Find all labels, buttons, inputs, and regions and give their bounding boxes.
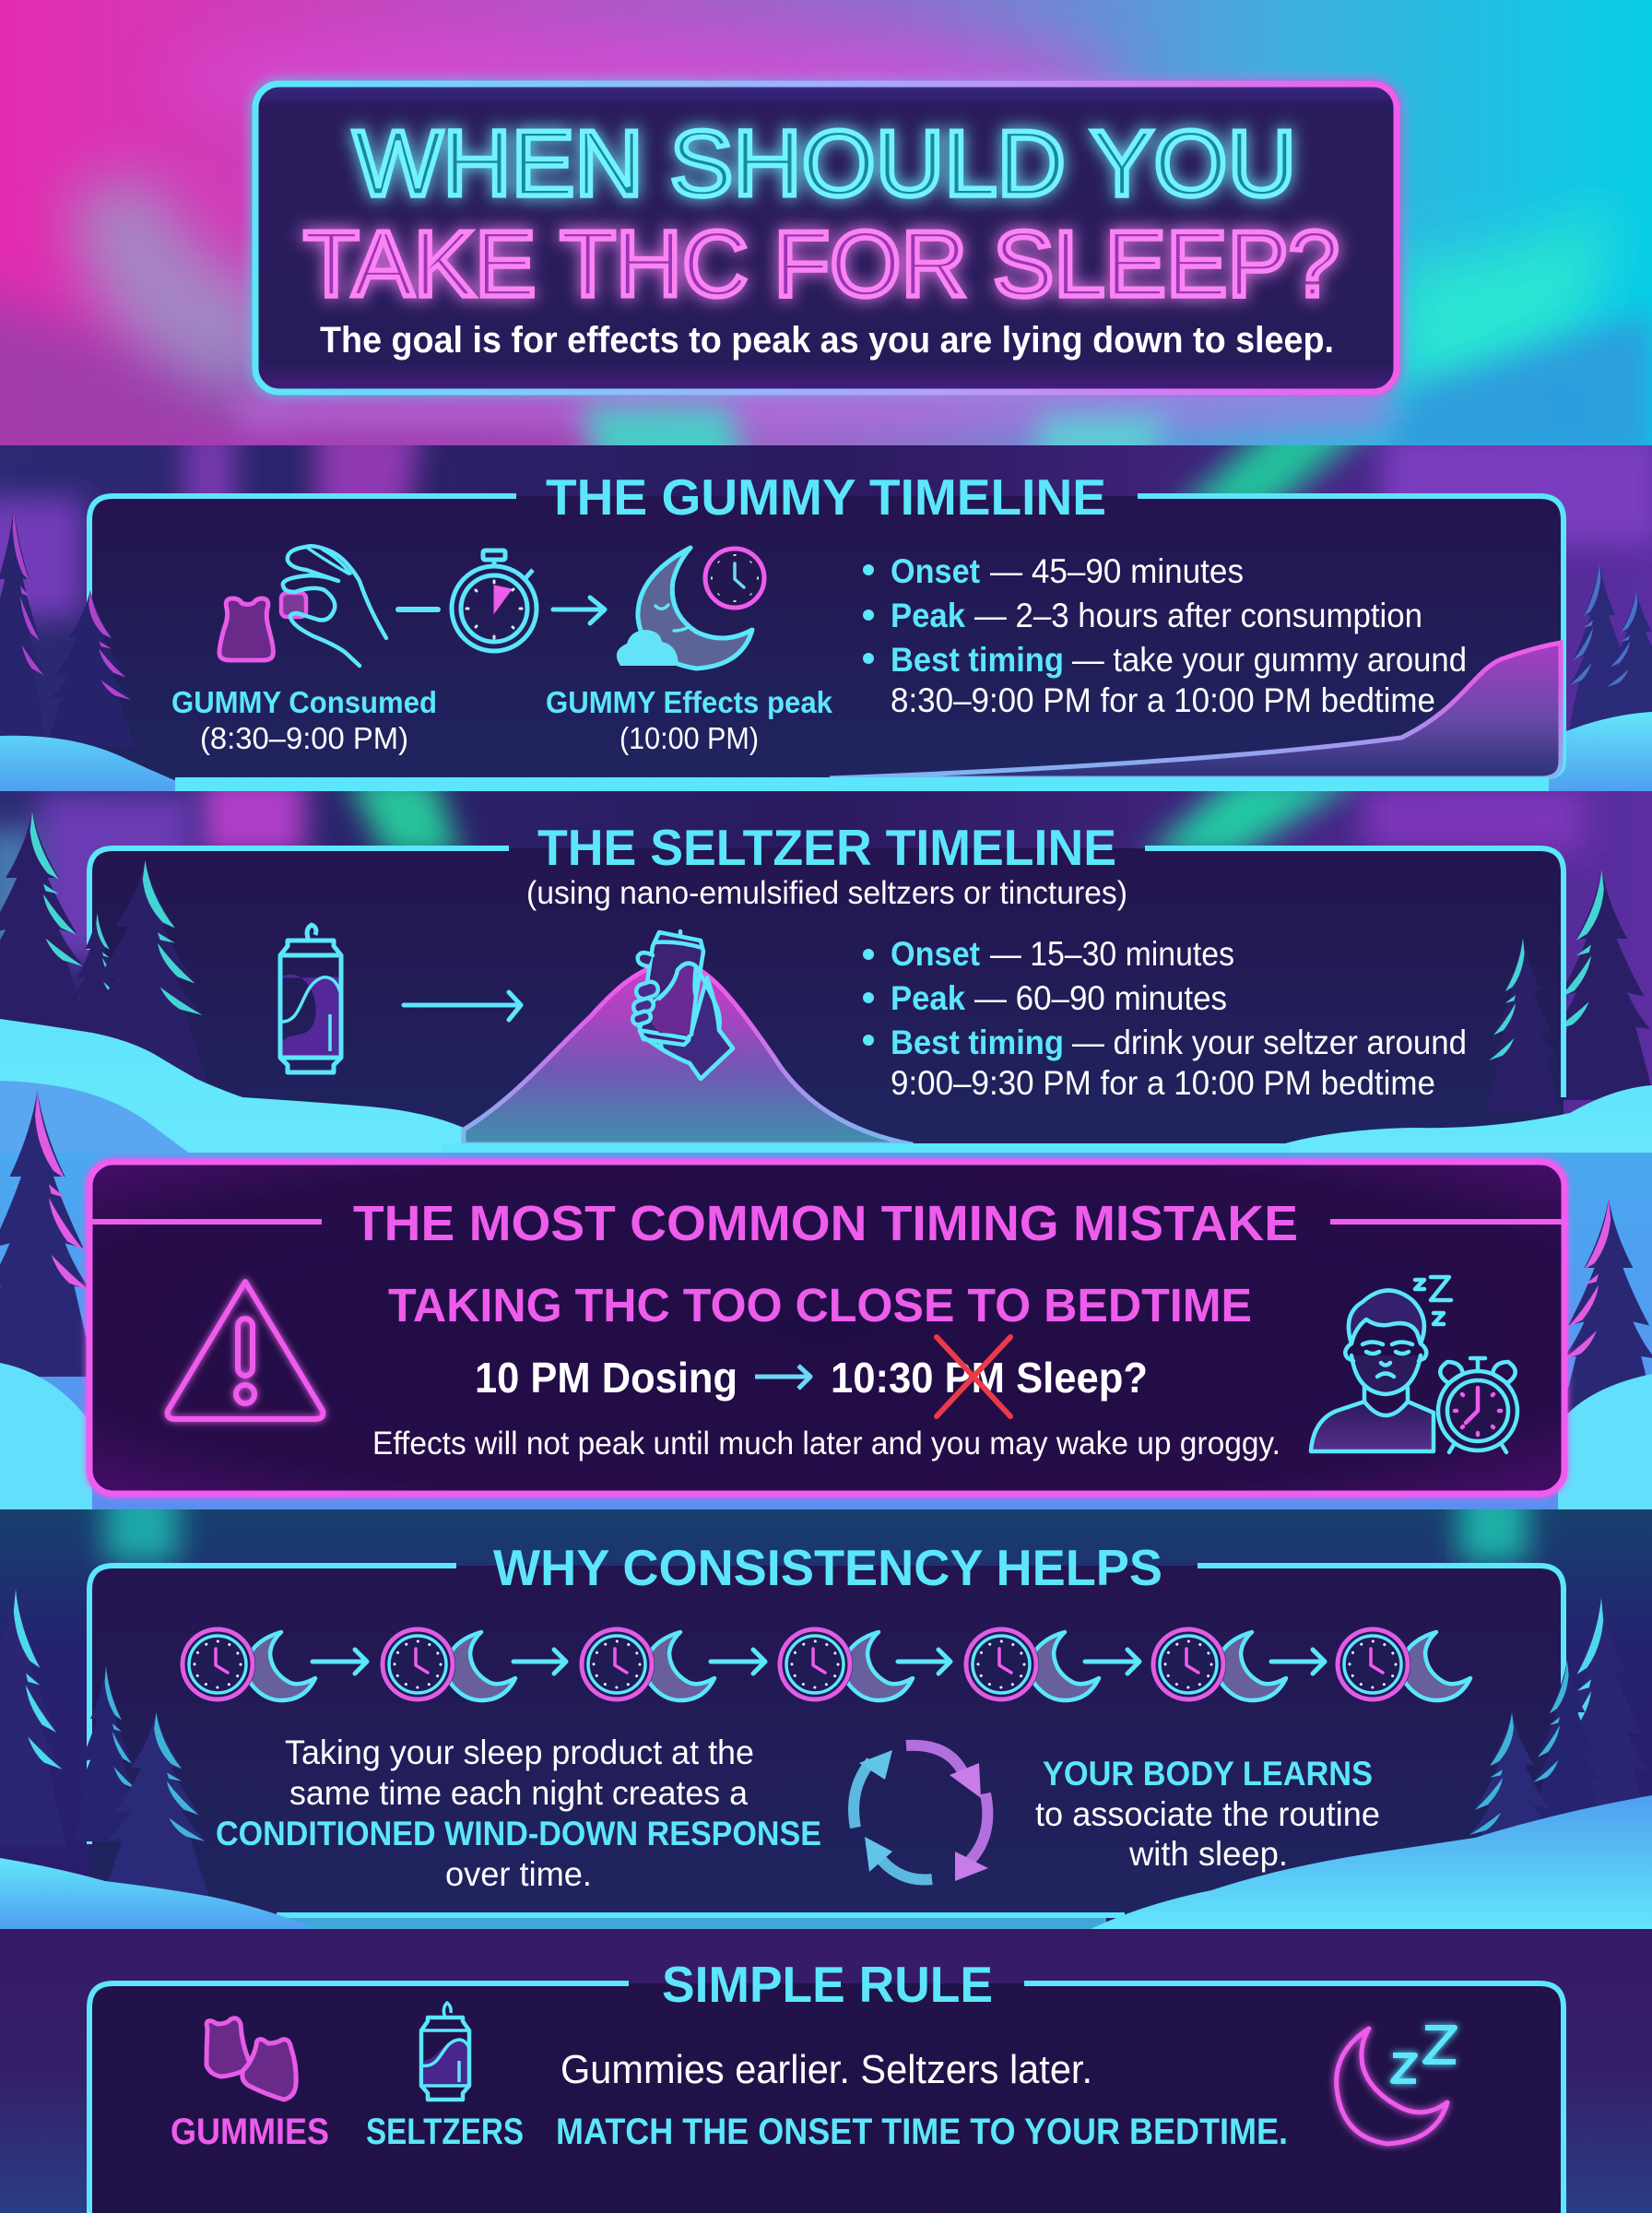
icon: gummy bear (219, 598, 273, 660)
subtitle: The goal is for effects to peak as you are lying down to sleep. (320, 320, 1334, 361)
bullet list: seltzer facts (863, 935, 1467, 1102)
icon: cycle arrows (854, 1746, 988, 1881)
heading: gummy timeline: THE GUMMY TIMELINE (546, 468, 1106, 526)
tree overlapping panel edge (46, 590, 135, 747)
heading: consistency: WHY CONSISTENCY HELPS (493, 1539, 1162, 1596)
header background with aurora (0, 0, 1652, 479)
label: gummy consumed: (8:30–9:00 PM) (200, 721, 408, 755)
panel: seltzer timeline (0, 819, 1652, 1160)
bullet list: seltzer facts: — 60–90 minutes (974, 979, 1227, 1017)
bullet list: seltzer facts: 9:00–9:30 PM for a 10:00 PM bedtime (891, 1064, 1435, 1102)
panel: why consistency helps (0, 1539, 1652, 1929)
icon: hand holding can (631, 931, 733, 1079)
label: gummy consumed: GUMMY Consumed (171, 685, 437, 719)
text: conditioned response: CONDITIONED WIND-DOWN RESPONSE (216, 1815, 821, 1852)
snow: consistency right (1091, 1795, 1652, 1929)
snow band (175, 777, 1549, 791)
arrow (404, 992, 521, 1020)
bullet list: gummy facts (863, 552, 1467, 719)
icon: sleeping moon with clock (617, 548, 764, 669)
curve: onset wave (830, 643, 1561, 778)
bell curve peak (464, 961, 912, 1144)
bullet list: gummy facts: Best timing (891, 641, 1064, 679)
icon: two gummies (206, 2018, 296, 2100)
section background: gummy (0, 445, 1652, 767)
title line 1: WHEN SHOULD YOU (353, 112, 1296, 216)
heading: mistake: THE MOST COMMON TIMING MISTAKE (353, 1196, 1298, 1251)
icon row: nightly clock and moon sequence (180, 1627, 1470, 1702)
panel border (89, 496, 1564, 779)
section background: simple rule (0, 1929, 1652, 2213)
text: your body learns: YOUR BODY LEARNS (1043, 1755, 1373, 1793)
panel: simple rule (89, 1956, 1564, 2213)
bullet list: gummy facts: Peak (891, 597, 965, 634)
bullet list: gummy facts: 8:30–9:00 PM for a 10:00 PM bedtime (891, 681, 1435, 719)
title panel (255, 84, 1397, 392)
title line 2: TAKE THC FOR SLEEP? (303, 213, 1339, 316)
icon: seltzer can small (421, 2003, 469, 2100)
panel: gummy timeline (0, 468, 1652, 791)
text: sleep time: 10:30 PM Sleep? (831, 1354, 1148, 1402)
icon: seltzer can (280, 925, 341, 1072)
bullet list: seltzer facts: Peak (891, 979, 965, 1017)
dash connector (398, 607, 438, 612)
subheading: (using nano-emulsified seltzers or tinctures) (526, 875, 1127, 911)
snow: seltzer right (1245, 1085, 1652, 1160)
icon: hand holding gummy (281, 546, 386, 666)
label: gummy effects peak: GUMMY Effects peak (546, 685, 833, 719)
bullet list: seltzer facts: Best timing (891, 1024, 1064, 1061)
icon: warning triangle (168, 1282, 323, 1419)
label: gummy effects peak (546, 685, 833, 755)
bullet list: gummy facts: — take your gummy around (1072, 641, 1467, 679)
bullet list: seltzer facts: Onset (891, 935, 980, 973)
panel border (89, 848, 1564, 1097)
panel: most common timing mistake (89, 1162, 1564, 1494)
text: your body learns: with sleep. (1128, 1835, 1288, 1873)
icon: groggy person with alarm clock (1311, 1277, 1517, 1452)
text: gummies earlier seltzers later: Gummies earlier. Seltzers later. (560, 2047, 1092, 2092)
heading rules (89, 1219, 1564, 1225)
bullet list: seltzer facts: — 15–30 minutes (990, 935, 1234, 973)
text: conditioned response (216, 1734, 821, 1893)
text: match onset time: MATCH THE ONSET TIME TO YOUR BEDTIME. (556, 2112, 1288, 2152)
heading: seltzer timeline: THE SELTZER TIMELINE (537, 819, 1116, 876)
text: groggy warning: Effects will not peak until much later and you may wake up groggy. (372, 1426, 1280, 1462)
snow band (442, 1143, 1291, 1160)
snow: consistency left (0, 1858, 316, 1929)
snow: seltzer left lower layer (0, 1081, 198, 1160)
arrow (553, 598, 605, 623)
text: conditioned response: same time each night creates a (289, 1774, 748, 1812)
trees inside panel (74, 1660, 1604, 1897)
panel border (89, 1983, 1564, 2213)
trees inside panel (72, 860, 1560, 1113)
subheading: too close to bedtime: TAKING THC TOO CLOSE TO BEDTIME (388, 1279, 1252, 1331)
section background: mistake (0, 1091, 1652, 1509)
panel border (89, 1566, 1564, 1915)
bullet list: seltzer facts: — drink your seltzer around (1072, 1024, 1467, 1061)
label: gummy consumed (171, 685, 437, 755)
text: your body learns: to associate the routine (1035, 1795, 1380, 1833)
text: conditioned response: over time. (445, 1855, 592, 1893)
label: gummy effects peak: (10:00 PM) (620, 721, 759, 755)
bullet list: gummy facts: Onset (891, 552, 980, 590)
heading: simple rule: SIMPLE RULE (662, 1956, 993, 2013)
text: dosing time: 10 PM Dosing (475, 1354, 738, 1402)
label: seltzers: SELTZERS (366, 2112, 524, 2152)
snow: seltzer left (0, 1019, 516, 1160)
section background: consistency (0, 1485, 1652, 1929)
icon: neon moon with z letters (1337, 2028, 1456, 2144)
icon: stopwatch (452, 550, 537, 651)
red cross (937, 1337, 1010, 1416)
arrow (755, 1366, 810, 1389)
bullet list: gummy facts: — 2–3 hours after consumption (974, 597, 1422, 634)
snow: gummy section (0, 712, 1652, 791)
snow band (277, 1918, 1106, 1929)
label: gummies: GUMMIES (171, 2112, 329, 2152)
text: your body learns (1035, 1755, 1380, 1873)
bullet list: gummy facts: — 45–90 minutes (990, 552, 1244, 590)
section background: seltzer (0, 791, 1652, 1114)
text: conditioned response: Taking your sleep product at the (285, 1734, 754, 1771)
